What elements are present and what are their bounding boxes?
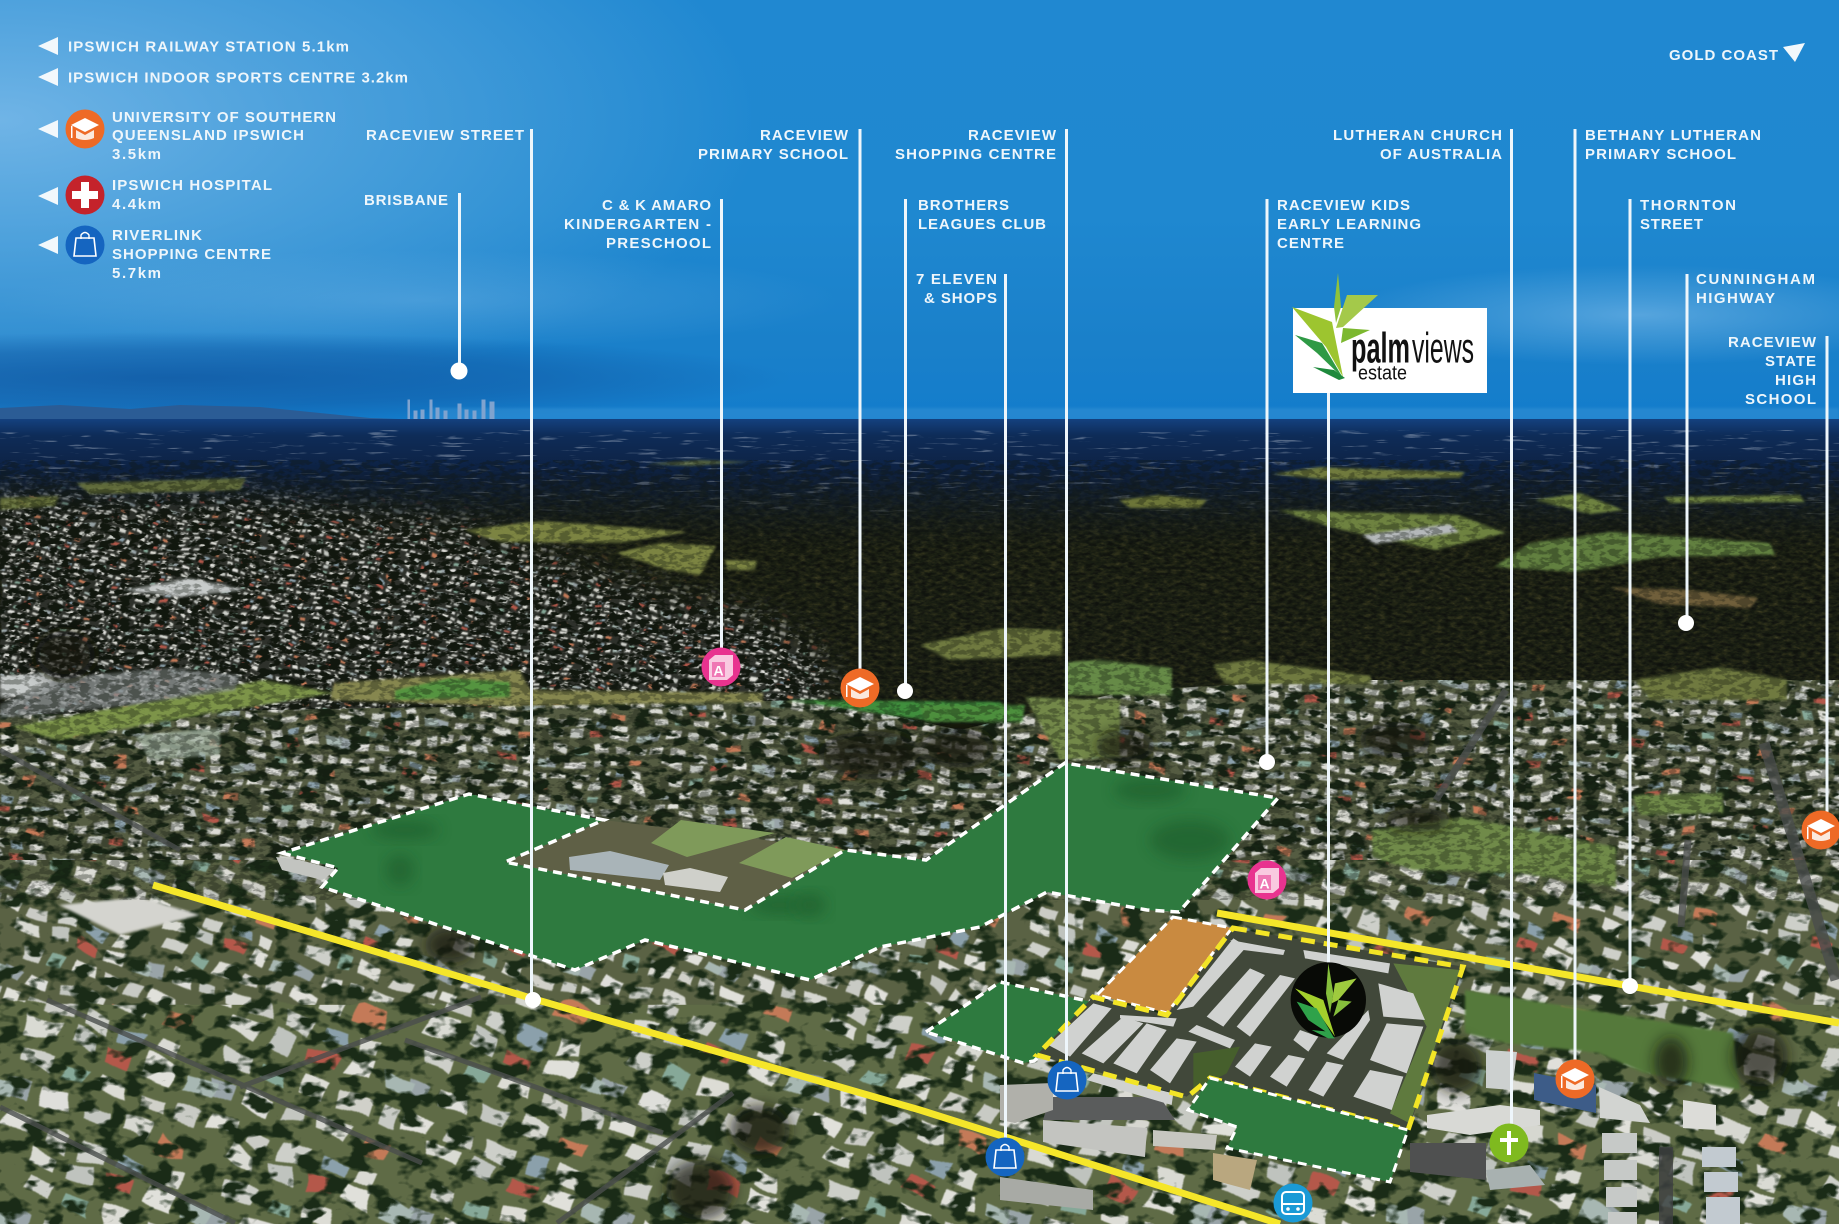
estate marker: palm badge: [1291, 962, 1366, 1038]
callout: Raceview Street: [366, 127, 541, 1008]
estate boundary yellow dashes: [1037, 928, 1463, 1130]
road: Thornton Street yellow line: [1217, 913, 1839, 1023]
palm views estate logo: views: [1412, 324, 1474, 372]
callout: Raceview State High School: HIGH: [1775, 372, 1816, 389]
callout: Lutheran Church of Australia: LUTHERAN CHURCH: [1333, 127, 1502, 144]
warehouses and large roofs: [0, 524, 1459, 935]
callout: Bethany Lutheran Primary School: BETHANY LUTHERAN: [1585, 127, 1761, 144]
green land release: small parcel: [926, 982, 1097, 1063]
legend: Ipswich Hospital: IPSWICH HOSPITAL: [112, 177, 272, 194]
church and school buildings: [1410, 1050, 1740, 1224]
callout: Bethany Lutheran Primary School: [1556, 127, 1761, 1098]
legend: Ipswich Hospital: 4.4km: [112, 196, 161, 213]
central site buildings and lawn: [276, 820, 845, 910]
callout: Lutheran Church of Australia: [1333, 127, 1528, 1162]
tree mottling over open land: [0, 460, 1839, 900]
legend: Ipswich Hospital: [38, 176, 272, 214]
callout: Cunningham Highway: CUNNINGHAM: [1696, 271, 1815, 288]
roads: [0, 690, 1836, 1224]
legend: Riverlink Shopping Centre: 5.7km: [112, 265, 161, 282]
palm views estate logo: [1292, 273, 1487, 965]
callout: Brothers Leagues Club: LEAGUES CLUB: [918, 216, 1046, 233]
legend: Ipswich Indoor Sports Centre: IPSWICH INDOOR SPORTS CENTRE 3.2km: [68, 70, 408, 86]
grass fields and open land: [0, 460, 1805, 1090]
callout: Raceview Primary School: RACEVIEW: [760, 127, 849, 144]
callout: Raceview State High School: STATE: [1765, 353, 1816, 370]
legend: destinations off map: [38, 37, 408, 282]
callout: 7 Eleven & Shops: & SHOPS: [924, 290, 997, 307]
callout: Thornton Street: THORNTON: [1640, 197, 1736, 214]
callout: Thornton Street: STREET: [1640, 216, 1703, 233]
green land release: main stage: [282, 763, 1278, 980]
bus icon: [1274, 1184, 1312, 1222]
dark tree clusters: [35, 631, 1788, 1220]
legend: Riverlink Shopping Centre: [38, 226, 271, 282]
green land release: south parcel: [1188, 1078, 1408, 1182]
shopping centre precinct: [1000, 1083, 1257, 1210]
callout: Brisbane: BRISBANE: [364, 192, 448, 209]
land parcel: orange display block: [1097, 917, 1232, 1013]
legend: University of Southern Queensland: QUEENSLAND IPSWICH: [112, 127, 304, 144]
callout: Raceview Kids Early Learning Centre: [1259, 197, 1421, 770]
housing stage completed: [1037, 928, 1463, 1130]
callout: Raceview Shopping Centre: [895, 127, 1086, 1100]
legend: Riverlink Shopping Centre: RIVERLINK: [112, 227, 202, 244]
distant mountains: [0, 405, 480, 432]
callout: Lutheran Church of Australia: OF AUSTRALIA: [1380, 146, 1502, 163]
legend: Ipswich Railway Station: IPSWICH RAILWAY STATION 5.1km: [68, 38, 349, 56]
legend: University of Southern Queensland: [38, 109, 336, 163]
road: Raceview Street yellow line: [153, 885, 1280, 1224]
callout: Thornton Street: [1622, 197, 1736, 994]
callout: Brothers Leagues Club: [897, 197, 1046, 699]
callout: pink childcare icon: [1248, 860, 1286, 900]
aerial ground: base, forest and suburbs: [0, 419, 1839, 1224]
callout: 7 Eleven & Shops: 7 ELEVEN: [916, 271, 997, 288]
callout: Raceview State High School: SCHOOL: [1745, 391, 1816, 408]
callout: Raceview Street: RACEVIEW STREET: [366, 127, 524, 144]
callout: C & K Amaro Kindergarten: KINDERGARTEN -: [564, 216, 711, 233]
callout: Brisbane: [364, 192, 468, 380]
callout: Raceview State High School: [1728, 334, 1839, 850]
sky background: [0, 0, 1839, 430]
callout: Raceview Kids Early Learning Centre: RACEVIEW KIDS: [1277, 197, 1410, 214]
callout: Raceview Primary School: [698, 127, 880, 708]
palm views estate logo: estate: [1358, 362, 1407, 384]
callout: Cunningham Highway: HIGHWAY: [1696, 290, 1775, 307]
legend: University of Southern Queensland: UNIVERSITY OF SOUTHERN: [112, 109, 336, 126]
callout: Raceview Shopping Centre: RACEVIEW: [968, 127, 1057, 144]
callout: 7 Eleven & Shops: [916, 271, 1024, 1176]
callout: Raceview Kids Early Learning Centre: EARLY LEARNING: [1277, 216, 1421, 233]
legend: Riverlink Shopping Centre: SHOPPING CENTRE: [112, 246, 271, 263]
callout: Raceview Kids Early Learning Centre: CENTRE: [1277, 235, 1344, 252]
callout: Bethany Lutheran Primary School: PRIMARY SCHOOL: [1585, 146, 1736, 163]
callout: Brothers Leagues Club: BROTHERS: [918, 197, 1009, 214]
callout: Raceview Shopping Centre: SHOPPING CENTRE: [895, 146, 1056, 163]
callout: Raceview Primary School: PRIMARY SCHOOL: [698, 146, 848, 163]
callout: C & K Amaro Kindergarten: [564, 197, 740, 686]
callout: Raceview State High School: RACEVIEW: [1728, 334, 1817, 351]
callout: Cunningham Highway: [1678, 271, 1815, 631]
direction: Gold Coast: [1669, 43, 1805, 64]
Brisbane skyline: [408, 400, 494, 420]
direction: Gold Coast: GOLD COAST: [1669, 47, 1778, 64]
legend: University of Southern Queensland: 3.5km: [112, 146, 161, 163]
palm views estate logo: palm: [1351, 324, 1410, 372]
callout: C & K Amaro Kindergarten: C & K AMARO: [602, 197, 711, 214]
callout: C & K Amaro Kindergarten: PRESCHOOL: [606, 235, 711, 252]
